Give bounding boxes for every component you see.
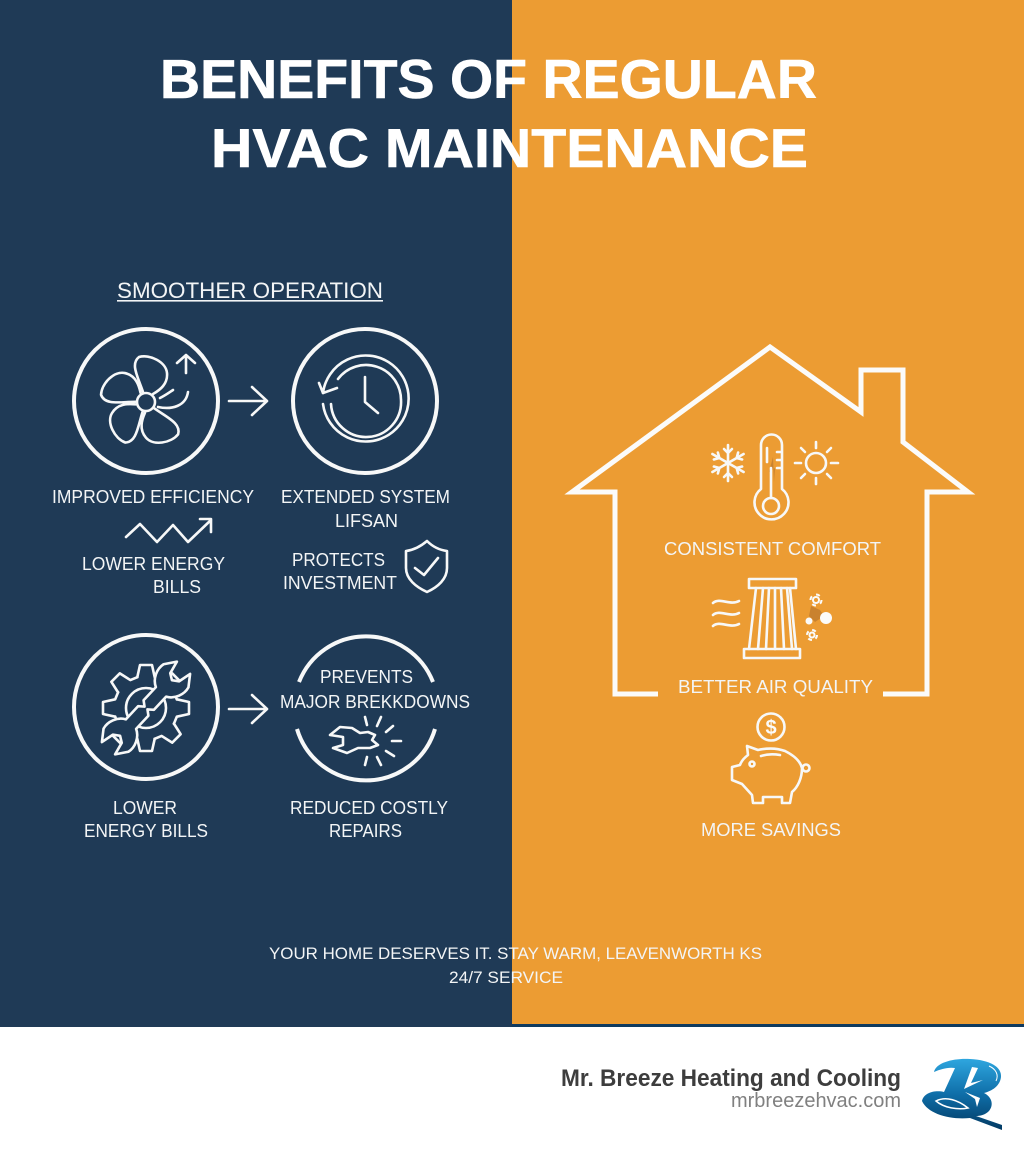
label: protects investment bbox=[283, 550, 397, 593]
label: prevents major breakdowns bbox=[280, 667, 470, 712]
panel: navy left background bbox=[0, 0, 512, 1027]
icon: piggy bank with coin bbox=[732, 714, 810, 803]
label: more savings: MORE SAVINGS bbox=[701, 820, 841, 840]
house outline bbox=[572, 347, 968, 694]
panel: orange right background bbox=[512, 0, 1024, 1024]
footer company name: Mr. Breeze Heating and Cooling bbox=[561, 1065, 901, 1092]
tagline: YOUR HOME DESERVES IT. STAY WARM, LEAVENWORTH KS bbox=[269, 944, 762, 963]
label: reduced costly repairs: REPAIRS bbox=[329, 821, 402, 841]
tagline bbox=[269, 944, 762, 987]
arrow: fan to clock bbox=[229, 387, 267, 415]
label: extended system lifsan: EXTENDED SYSTEM bbox=[281, 487, 450, 507]
section heading: smoother operation: SMOOTHER OPERATION bbox=[117, 278, 383, 303]
label: reduced costly repairs: REDUCED COSTLY bbox=[290, 798, 448, 818]
icon: clock in circle bbox=[293, 329, 437, 473]
label: lower energy bills 2: ENERGY BILLS bbox=[84, 821, 208, 841]
label: prevents major breakdowns: PREVENTS bbox=[320, 667, 413, 687]
icon: air waves bbox=[713, 601, 739, 626]
label: lower energy bills: BILLS bbox=[153, 577, 201, 597]
icon: broken wrench in split circle bbox=[297, 636, 435, 780]
icon: dust particles bbox=[806, 594, 832, 640]
icon: gear and wrench in circle bbox=[74, 635, 218, 779]
footer top rule bbox=[512, 1024, 1024, 1027]
icon: zigzag trend arrow bbox=[126, 519, 211, 542]
icon: sun bbox=[795, 442, 838, 484]
label: better air quality: BETTER AIR QUALITY bbox=[678, 677, 873, 697]
label: prevents major breakdowns: MAJOR BREKKDOWNS bbox=[280, 692, 470, 712]
label: protects investment: INVESTMENT bbox=[283, 573, 397, 593]
label: lower energy bills bbox=[82, 554, 225, 597]
title bbox=[160, 48, 817, 179]
icon: fan in circle bbox=[74, 329, 218, 473]
label: consistent comfort: CONSISTENT COMFORT bbox=[664, 539, 881, 559]
title: HVAC MAINTENANCE bbox=[211, 117, 808, 179]
label: extended system lifsan bbox=[281, 487, 450, 531]
label: lower energy bills 2 bbox=[84, 798, 208, 841]
label: protects investment: PROTECTS bbox=[292, 550, 385, 570]
logo: stylized B bbox=[922, 1059, 1002, 1130]
footer url: mrbreezehvac.com bbox=[731, 1090, 901, 1112]
icon: piggy bank with coin: $ bbox=[765, 717, 777, 739]
tagline: 24/7 SERVICE bbox=[449, 968, 563, 987]
icon: snowflake bbox=[712, 445, 744, 481]
label: lower energy bills: LOWER ENERGY bbox=[82, 554, 225, 574]
label: reduced costly repairs bbox=[290, 798, 448, 841]
icon: air filter bbox=[744, 579, 800, 658]
icon: thermometer bbox=[754, 435, 788, 519]
label: lower energy bills 2: LOWER bbox=[113, 798, 177, 818]
icon: shield check bbox=[406, 541, 447, 592]
label: extended system lifsan: LIFSAN bbox=[335, 511, 398, 531]
label: improved efficiency: IMPROVED EFFICIENCY bbox=[52, 487, 254, 507]
arrow: gear to breakdown bbox=[229, 695, 267, 723]
title: BENEFITS OF REGULAR bbox=[160, 48, 817, 110]
